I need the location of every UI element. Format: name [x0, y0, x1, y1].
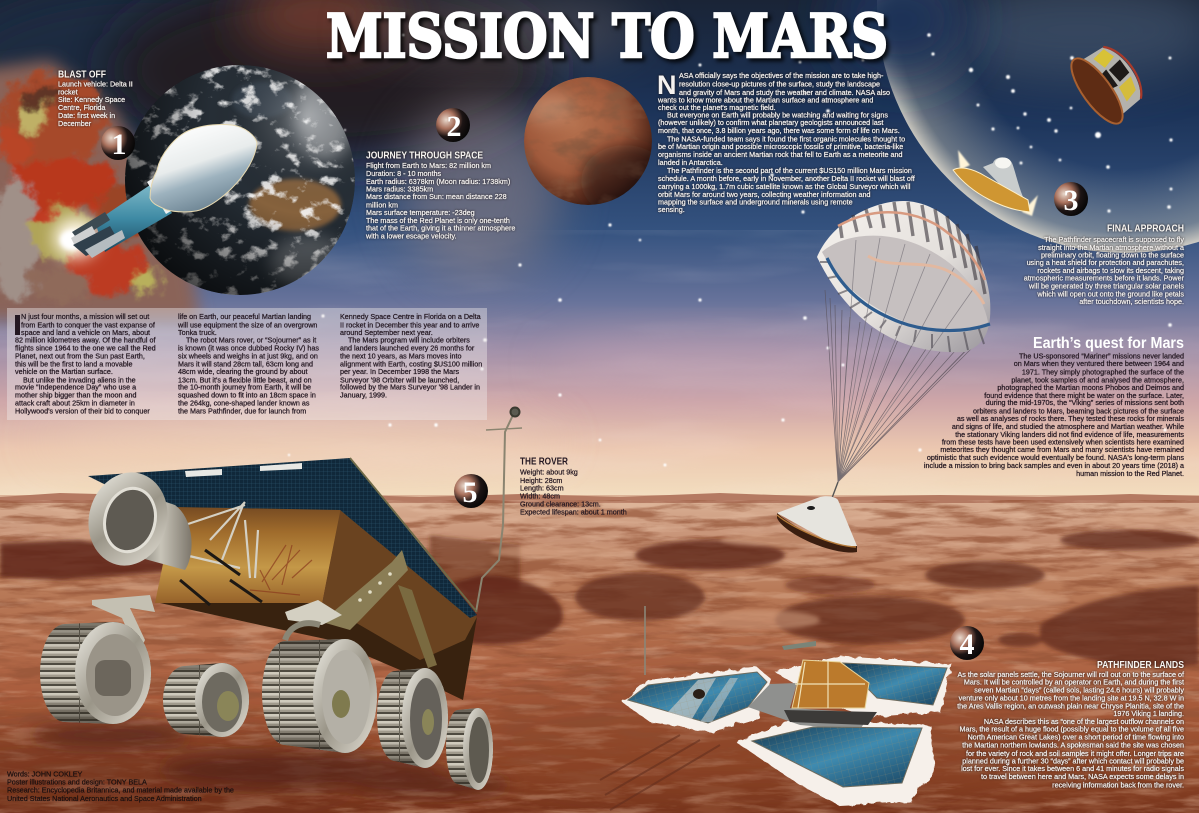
text block: NASA objectives: ASA officially says the objectives of the mission are to take high- [679, 71, 884, 80]
text block: Earth's quest for Mars: orbiters and landers to Mars, beaming back pictures of the surface [973, 406, 1184, 416]
text block: Earth's quest for Mars: planet, took samples of and analysed the atmosphere, [1011, 376, 1184, 384]
step marker 5 [454, 474, 488, 509]
text block: intro columns: 48cm wide, clearing the ground by about [178, 367, 307, 376]
text block: Earth's quest for Mars: on Mars when they ventured there between 1964 and [1014, 359, 1184, 368]
text block: intro columns: flights since 1964 to the one we call the Red [15, 344, 156, 353]
illustration: parachute [817, 201, 990, 482]
illustration: Sojourner rover [40, 408, 522, 790]
text block: Pathfinder Lands: 1976 Viking 1 landing. [1113, 709, 1184, 718]
text block: Blast Off: December [58, 119, 92, 128]
text block: credits: Poster illustrations and design: TONY BELA [7, 778, 147, 786]
text block: Earth's quest for Mars: include a mission to bring back samples and even in about 20 years time (2018) a [924, 461, 1184, 470]
text block: The Rover: THE ROVER [520, 456, 569, 468]
text block: Journey Through Space: The mass of the Red Planet is only one-tenth [366, 216, 510, 225]
text block: intro columns: N just four months, a mission will set out [21, 312, 149, 321]
text block: credits: United States National Aeronautics and Space Administration [7, 794, 202, 803]
sky background [0, 0, 1199, 500]
step marker 1: 1 [112, 128, 126, 161]
text block: intro columns: Planet, next out from the Sun past Earth, [15, 351, 145, 360]
crater shadows [0, 530, 1199, 666]
mast with camera [476, 408, 522, 612]
text block: intro columns: The robot Mars rover, or “Sojourner” as it [186, 336, 316, 345]
wheel 5 [446, 708, 493, 790]
front body face [155, 502, 342, 603]
right solar panel [843, 663, 947, 705]
text block: Pathfinder Lands: Mars, the result of a huge flood (possibly equal to the volume of all five [959, 724, 1184, 734]
text block: intro columns: space and land a vehicle on Mars, about [21, 328, 150, 337]
title: MISSION TO MARS [326, 2, 888, 72]
text block: Pathfinder Lands: lost for ever. Since it takes between 6 and 41 minutes for radio signals [961, 764, 1184, 773]
step marker 4: 4 [960, 628, 974, 661]
drop cap [15, 315, 20, 335]
text block: NASA objectives: resolution close-up pictures of the surface, study the landscape [679, 80, 880, 88]
text block: Journey Through Space: Mars radius: 3385km [366, 184, 433, 194]
text block: NASA objectives: month, that once, 3.8 billion years ago, there was some form of life on Mars. [658, 126, 900, 135]
text block: Pathfinder Lands: seven Martian “days” (called sols, lasting 24.6 hours) will probably [974, 686, 1184, 694]
spacecraft: heat shield entry [953, 150, 1038, 216]
text block: NASA objectives: be of Martian origin and possible microscopic fossils of primitive, bacteria-like [658, 142, 903, 151]
spacecraft: cruise stage [1063, 35, 1154, 131]
text block: Final Approach [1024, 224, 1185, 306]
wheel 1 [40, 622, 151, 724]
text block: Earth's quest for Mars: from these tests have been used extensively when scientists here examined [942, 438, 1184, 446]
text block: Earth's quest for Mars: during the mid-1970s, the “Viking” series of missions sent both [986, 398, 1184, 407]
text block: intro columns: this will be the first to land a movable [15, 359, 132, 368]
text block: Journey Through Space [365, 150, 515, 240]
text block: Final Approach: The Pathfinder spacecraft is supposed to fly [1044, 235, 1184, 244]
step marker 5: 5 [462, 476, 478, 509]
text block: Pathfinder Lands: for the variety of rock and soil samples it might offer. Longer trips are [966, 749, 1184, 758]
text block: Final Approach: preliminary orbit, floating down to the surface [1041, 250, 1184, 260]
text block: Journey Through Space: Flight from Earth to Mars: 82 million km [366, 161, 491, 170]
text block: Final Approach: straight into the Martian atmosphere without a [1038, 243, 1184, 252]
text block: Earth's quest for Mars: 1971. They simply photographed the surface of the [1022, 368, 1184, 376]
text block: intro columns: per year. In December 1998 the Mars [340, 367, 459, 376]
text block: Journey Through Space: million km [366, 200, 398, 210]
wheel 3 [262, 639, 377, 753]
text block: NASA objectives: schedule. A month before, early in November, another Delta II rocket will blast off [658, 174, 915, 183]
left solar panel [628, 672, 767, 723]
planet: Mars [524, 77, 652, 205]
text block: NASA objectives: carrying a 1000kg, 1.7m cubic satellite known as the Global Surveyor which will [658, 182, 911, 191]
text block: NASA objectives: The Pathfinder is the second part of the current $US150 million Mars mission [667, 166, 912, 175]
text block: The Rover [520, 456, 627, 516]
camera drum [130, 490, 192, 570]
text block: Pathfinder Lands: the Ares Vallis region, an outwash plain near Chryse Planitia, site of the [957, 702, 1184, 710]
text block: NASA objectives: check out the planet's magnetic field. [658, 103, 776, 112]
drop cap N: N [657, 70, 676, 100]
globe: Earth [120, 60, 360, 300]
text block: Pathfinder Lands: Mars. It will be controlled by an operator on Earth, and during the first [964, 678, 1184, 686]
text block: NASA objectives: mapping the surface and underground minerals using remote [658, 198, 853, 206]
text block: Earth's quest for Mars: The US-sponsored “Mariner” missions never landed [1019, 352, 1184, 360]
text block: Final Approach: rockets and airbags to slow its descent, taking [1037, 266, 1184, 275]
text block: intro columns: alignment with Earth, costing $US100 million [340, 359, 482, 368]
text block: NASA objectives: (however unlikely) to confirm what planetary geologists announced last [658, 118, 883, 127]
text block: NASA objectives: landed in Antarctica. [658, 158, 723, 167]
text block: intro columns: 82 million kilometres away. Of the handful of [15, 336, 156, 345]
antenna mast [644, 606, 646, 675]
orange instrument box [792, 660, 869, 708]
text block: Final Approach: FINAL APPROACH [1107, 224, 1184, 234]
text block: Journey Through Space: Mars surface temperature: -23deg [366, 208, 475, 217]
text block: Earth's quest for Mars: optimistic that such evidence would eventually be found. NASA's long-term plans [927, 453, 1184, 462]
text block: Earth's quest for Mars: found evidence that there might be water on the surface. Later, [984, 391, 1184, 400]
text block: intro columns: Surveyor '98 Orbiter will be launched, [340, 375, 459, 384]
step marker 2 [436, 108, 470, 143]
text block: credits: Words: JOHN COKLEY [7, 770, 83, 778]
explosion: rocket blast cloud [0, 60, 200, 320]
text block: intro columns: Kennedy Space Centre in Florida on a Delta [340, 312, 481, 321]
planet limb glow behind spacecraft [830, 0, 1199, 253]
text block: Pathfinder Lands: North American Great Lakes) over a short period of time flowing into [967, 732, 1184, 742]
text block: Final Approach: using a heat shield for protection and parachutes, [1027, 258, 1184, 267]
text block: NASA objectives: orbit Mars for around two years, collecting weather information and [658, 190, 871, 199]
text block: intro columns: life on Earth, our peaceful Martian landing [178, 312, 311, 321]
text block: Journey Through Space: JOURNEY THROUGH SPACE [366, 150, 483, 161]
text block: Earth's quest for Mars [924, 335, 1184, 478]
text block: intro columns: II rocket in December this year and to arrive [340, 320, 479, 329]
text block: NASA objectives: wants to know more about the Martian surface and atmosphere and [657, 96, 873, 104]
side body [322, 510, 477, 660]
text block: Pathfinder Lands [957, 660, 1184, 790]
text block: intro columns: vehicle on the Martian surface. [15, 367, 113, 376]
bottom solar panel [752, 727, 922, 787]
Martian ground [0, 493, 1199, 813]
text block: credits [7, 770, 234, 803]
text block: Final Approach: which will open out onto the ground like petals [1036, 290, 1184, 298]
step marker 4 [950, 626, 984, 661]
text block: Earth's quest for Mars: photographed the Martian moons Phobos and Deimos and [997, 383, 1184, 392]
solar panel [88, 458, 477, 618]
text block: intro columns: the Mars Pathfinder, due for launch from [178, 406, 306, 415]
text block: intro columns [15, 312, 482, 415]
text block: credits: Research: Encyclopedia Britannica, and material made available by the [7, 786, 234, 794]
text block: intro columns: squashed down to fit into an 18cm space in [178, 391, 316, 400]
text block: intro columns: will use equipment the size of an overgrown [177, 320, 317, 329]
text block: Blast Off: Centre, Florida [58, 103, 106, 112]
text block: Pathfinder Lands: to travel between here and Mars, NASA expects some delays in [981, 772, 1184, 781]
struts [185, 502, 258, 578]
text block: intro columns: the 10-month journey from Earth, it will be [178, 383, 311, 392]
text block: Journey Through Space: that of the Earth, giving it a thinner atmosphere [366, 224, 515, 232]
text block: intro columns: movie “Independence Day” who use a [15, 383, 136, 392]
step marker 1 [101, 126, 135, 161]
airbags [622, 656, 952, 806]
illustration: Pathfinder lander [622, 606, 952, 806]
text block: Blast Off: Date: first week in [58, 111, 115, 120]
text block: Journey Through Space: Mars distance from Sun: mean distance 228 [366, 192, 507, 201]
wheel 4 [377, 668, 448, 768]
text block: intro columns: from Earth to conquer the vast expanse of [21, 320, 155, 329]
text block: Pathfinder Lands: PATHFINDER LANDS [1097, 660, 1184, 671]
text block: intro columns: followed by the Mars Surveyor '98 Lander in [340, 383, 480, 392]
wheel 2 [163, 663, 249, 737]
text block: intro columns: six wheels and weighs in at just 9kg, and on [178, 351, 318, 360]
text block: intro columns: around September next year. [340, 328, 433, 337]
text block: intro columns: Tonka truck. [178, 328, 217, 337]
text block: Journey Through Space: Duration: 8 - 10 months [366, 169, 442, 178]
text block: Journey Through Space: with a lower escape velocity. [365, 232, 457, 240]
text block: intro columns: mother ship bigger than the moon and [15, 391, 136, 400]
step marker 3 [1054, 182, 1088, 217]
text block: intro columns: Hollywood's version of their bid to conquer [15, 406, 150, 415]
text block: intro columns: January, 1999. [340, 391, 387, 400]
text block: intro columns: the 264kg, cone-shaped lander known as [178, 399, 310, 408]
canopy dome [817, 201, 990, 352]
text block: NASA objectives: and gravity of Mars and study the weather and climate. NASA also [679, 88, 890, 97]
stars [288, 28, 1173, 466]
text block: The Rover: Ground clearance: 13cm. [520, 500, 601, 508]
text block: Earth's quest for Mars: Earth’s quest for Mars [1033, 335, 1184, 352]
underside [160, 603, 477, 700]
text block: NASA objectives: The NASA-funded team says it found the first organic molecules thought to [667, 134, 905, 144]
text block: Earth's quest for Mars: the stationary Viking landers did not find evidence of life, measurements [955, 430, 1184, 439]
text block: Earth's quest for Mars: human mission to the Red Planet. [1076, 469, 1184, 478]
text block: The Rover: Height: 28cm [520, 476, 562, 485]
text block: The Rover: Width: 48cm [520, 492, 560, 500]
text block: Earth's quest for Mars: as well as analyses of rocks there. They tested these rocks for minerals [957, 414, 1184, 423]
text block: Journey Through Space: Earth radius: 6378km (Moon radius: 1738km) [366, 177, 510, 186]
rocker arms [322, 550, 408, 630]
step marker 3: 3 [1064, 184, 1078, 217]
rover shadow on ground [30, 723, 510, 797]
shroud lines [825, 290, 988, 482]
upper canopy gores [840, 202, 985, 294]
text block: The Rover: Expected lifespan: about 1 month [520, 508, 627, 516]
text block: Pathfinder Lands: As the solar panels settle, the Sojourner will roll out on to the surface of [957, 670, 1184, 679]
text block: Blast Off: Launch vehicle: Delta II [58, 80, 133, 88]
underside lines [838, 238, 974, 482]
text block: intro columns: attack craft about 25km in diameter in [15, 399, 135, 408]
text block: Final Approach: atmospheric measurements before it lands. Power [1024, 274, 1185, 282]
text block: intro columns: the next 10 years, as Mars moves into [340, 351, 461, 360]
text block: Pathfinder Lands: planned during a further 30 “days” after which contact will probably be [962, 756, 1184, 766]
lower canopy gores [820, 262, 984, 352]
text block: NASA objectives: organisms inside an ancient Martian rock that fell to Earth as a meteorite and [658, 150, 903, 159]
text block: Pathfinder Lands: the Martian northern lowlands. A spokesman said the site was chosen [962, 740, 1184, 750]
crater highlights [30, 513, 1199, 630]
illustration: Delta II rocket [54, 125, 257, 258]
text block: Final Approach: after touchdown, scientists hope. [1079, 297, 1184, 306]
text block: Pathfinder Lands: NASA describes this as “one of the largest outflow channels on [984, 717, 1184, 726]
illustration: descending capsule [777, 482, 857, 552]
base plate [748, 683, 870, 730]
tracks in the soil [600, 735, 720, 810]
text block: Earth's quest for Mars: and signs of life, and studied the atmosphere and Martian weather. While [952, 422, 1184, 431]
text block: Pathfinder Lands: venture only about 10 metres from the landing site at 19.5 N, 32.8 W in [959, 694, 1184, 702]
text block: NASA objectives: But everyone on Earth will probably be watching and waiting for signs [667, 110, 888, 120]
text block: Blast Off: Site: Kennedy Space [58, 95, 125, 104]
text block: Blast Off: BLAST OFF [58, 70, 106, 80]
text block: The Rover: Length: 63cm [520, 484, 564, 492]
text block: intro columns: But unlike the invading aliens in the [23, 375, 136, 384]
text block: Earth's quest for Mars: meteorites they thought came from Mars and many scientists have remained [940, 445, 1184, 454]
text block: NASA objectives [657, 70, 915, 214]
text block: intro columns: Mars it will stand 28cm tall, 63cm long and [178, 359, 313, 368]
text block: Final Approach: will be generated by three triangular solar panels [1028, 282, 1184, 290]
text block: Pathfinder Lands: receiving information back from the rover. [1052, 780, 1184, 790]
text block: intro columns: and landers launched every 26 months for [340, 344, 475, 353]
text block: intro columns: 13cm. But it's a flexible little beast, and on [178, 375, 312, 384]
left translucent text panel [7, 308, 487, 420]
text block: Blast Off [58, 70, 133, 128]
text block: The Rover: Weight: about 9kg [520, 468, 578, 476]
text block: Blast Off: rocket [58, 88, 78, 96]
text block: NASA objectives: sensing. [658, 205, 685, 214]
text block: intro columns: is known (it was once dubbed Rocky IV) has [178, 344, 319, 353]
text block: intro columns: The Mars program will include orbiters [348, 336, 470, 345]
step marker 2: 2 [446, 110, 462, 143]
